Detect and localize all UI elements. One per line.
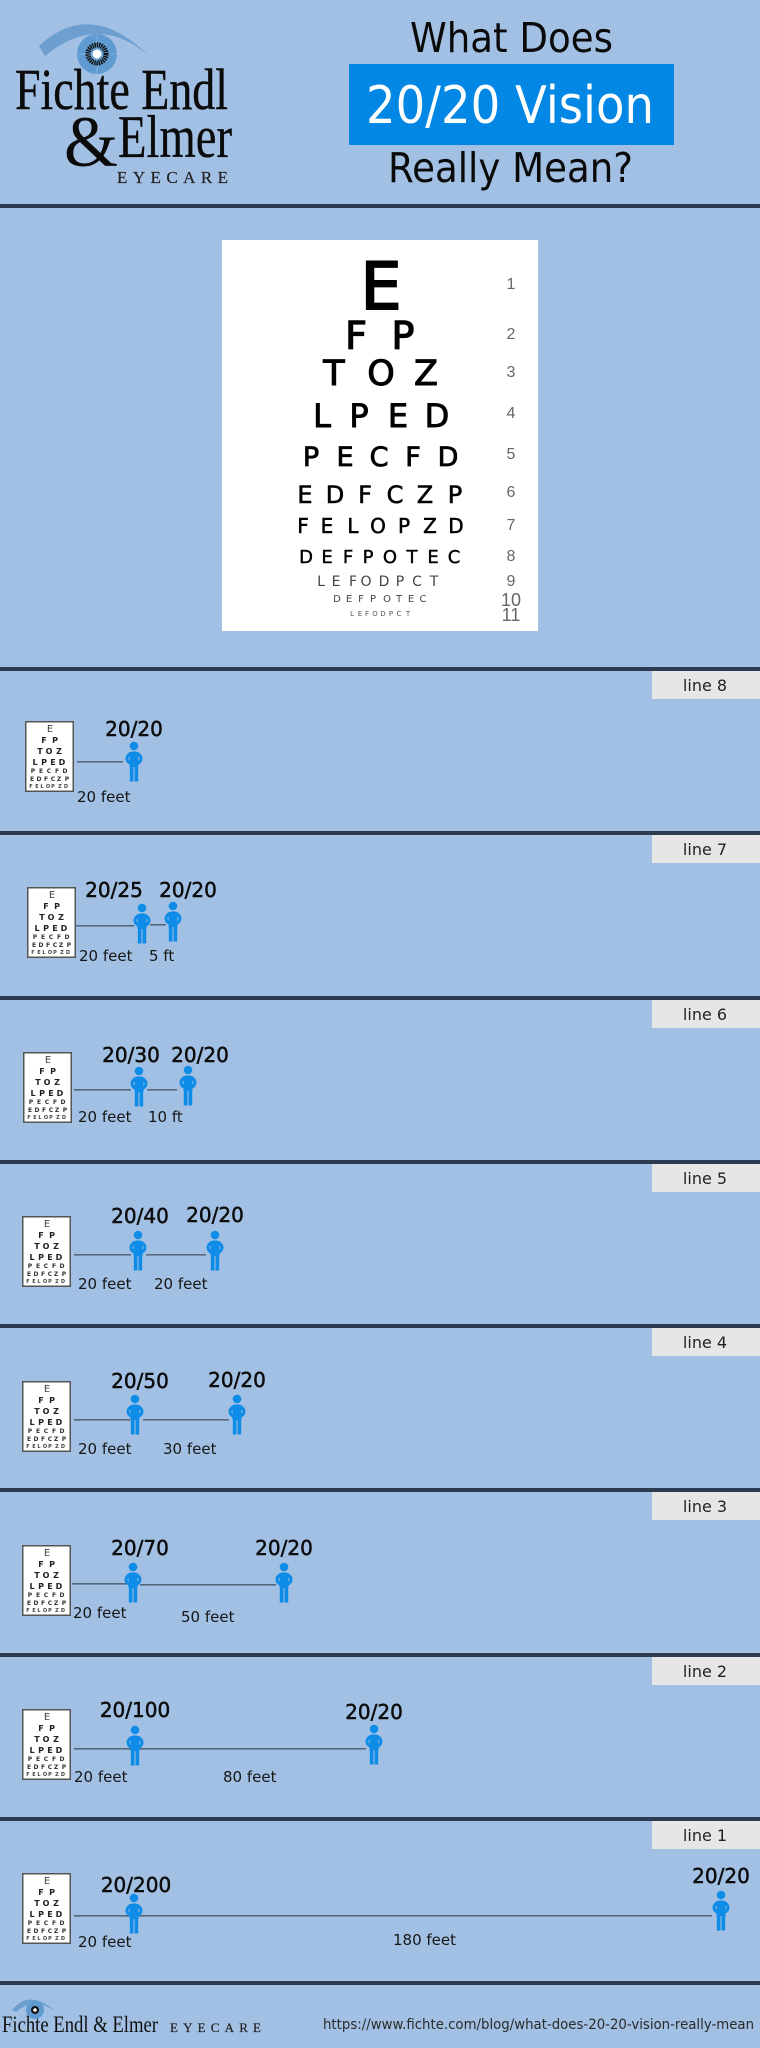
icon: eye brow arc bbox=[39, 24, 149, 56]
distance label: 180 feet bbox=[393, 1931, 456, 1949]
mini eye chart: FP bbox=[41, 736, 58, 745]
eye chart letters: TOZ bbox=[322, 354, 438, 394]
eye chart letters: EDFCZP bbox=[297, 481, 462, 509]
eye chart line numbers: 10 bbox=[501, 590, 521, 610]
eye chart letters: DEFPOTEC bbox=[299, 547, 460, 568]
distance line bbox=[143, 1419, 229, 1421]
tag: line 1 bbox=[652, 1821, 760, 1849]
icon: eye iris bbox=[77, 34, 117, 74]
mini eye chart: FP bbox=[38, 1396, 55, 1405]
tag: line 7 bbox=[652, 835, 760, 863]
mini eye chart bbox=[28, 888, 75, 957]
person bbox=[277, 1563, 291, 1602]
mini eye chart: LPED bbox=[29, 1910, 63, 1919]
logo wordmark line 1: Fichte Endl bbox=[15, 57, 228, 122]
mini eye chart: FP bbox=[43, 902, 60, 911]
eye chart line numbers: 4 bbox=[507, 405, 516, 422]
logo eyecare text: EYECARE bbox=[117, 168, 228, 187]
mini eye chart bbox=[26, 722, 73, 791]
person bbox=[128, 1726, 142, 1766]
distance line bbox=[72, 1583, 127, 1585]
distance line bbox=[75, 925, 134, 927]
mini eye chart: EDFCZP bbox=[28, 1107, 68, 1114]
eye chart line numbers bbox=[501, 276, 521, 625]
distance label: 30 feet bbox=[163, 1440, 217, 1458]
eye chart line numbers: 2 bbox=[507, 326, 516, 343]
acuity label: 20/20 bbox=[345, 1700, 403, 1724]
logo wordmark line 2: Elmer bbox=[118, 104, 232, 170]
footer wordmark: Fichte Endl & Elmer bbox=[2, 2012, 158, 2037]
distance line bbox=[74, 1254, 131, 1256]
distance label: 50 feet bbox=[181, 1608, 235, 1626]
tag: line 7: line 7 bbox=[683, 840, 727, 859]
mini eye chart: FELOPZD bbox=[26, 1936, 65, 1942]
mini eye chart: EDFCZP bbox=[27, 1764, 67, 1771]
person bbox=[181, 1066, 195, 1106]
mini eye chart: EDFCZP bbox=[27, 1436, 67, 1443]
tag: line 2: line 2 bbox=[683, 1662, 727, 1681]
mini eye chart: TOZ bbox=[34, 1899, 59, 1908]
distance label: 20 feet bbox=[73, 1604, 127, 1622]
mini eye chart: LPED bbox=[29, 1253, 63, 1262]
mini eye chart: PECFD bbox=[33, 934, 70, 941]
mini eye chart bbox=[23, 1217, 70, 1286]
tag: line 4: line 4 bbox=[683, 1333, 727, 1352]
mini eye chart: FP bbox=[39, 1067, 56, 1076]
panel: line 8 bbox=[26, 671, 760, 806]
mini eye chart: E bbox=[44, 1219, 50, 1230]
person bbox=[135, 904, 149, 944]
title banner: 20/20 Vision: 20/20 Vision bbox=[366, 76, 654, 136]
eye chart letters: DEFPOTEC bbox=[333, 594, 427, 605]
acuity label: 20/100 bbox=[100, 1698, 170, 1722]
mini eye chart: E bbox=[44, 1384, 50, 1395]
tag: line 1: line 1 bbox=[683, 1826, 727, 1845]
mini eye chart bbox=[24, 1053, 71, 1122]
mini eye chart: LPED bbox=[34, 924, 68, 933]
mini eye chart: PECFD bbox=[29, 1099, 66, 1106]
person bbox=[127, 1894, 141, 1934]
eye chart line numbers: 8 bbox=[507, 548, 516, 565]
tag: line 5: line 5 bbox=[683, 1169, 727, 1188]
mini eye chart: FP bbox=[38, 1560, 55, 1569]
mini eye chart: LPED bbox=[29, 1746, 63, 1755]
acuity label: 20/200 bbox=[101, 1873, 171, 1897]
eye chart line numbers: 11 bbox=[502, 605, 520, 625]
tag: line 8 bbox=[652, 671, 760, 699]
mini eye chart: EDFCZP bbox=[30, 776, 70, 783]
distance line bbox=[140, 1584, 276, 1586]
acuity label: 20/20 bbox=[171, 1043, 229, 1067]
mini eye chart: FELOPZD bbox=[31, 950, 70, 956]
eye chart letters: FP bbox=[345, 314, 414, 358]
person bbox=[166, 902, 180, 942]
mini eye chart: FP bbox=[38, 1888, 55, 1897]
mini eye chart: TOZ bbox=[34, 1407, 59, 1416]
distance label: 20 feet bbox=[78, 1275, 132, 1293]
mini eye chart: E bbox=[49, 890, 55, 901]
mini eye chart: LPED bbox=[30, 1089, 64, 1098]
mini eye chart: EDFCZP bbox=[27, 1600, 67, 1607]
distance line bbox=[77, 761, 123, 763]
mini eye chart: LPED bbox=[29, 1582, 63, 1591]
person bbox=[127, 742, 141, 782]
mini eye chart: FELOPZD bbox=[29, 784, 68, 790]
person bbox=[128, 1395, 142, 1434]
person bbox=[131, 1231, 145, 1270]
header logo: Fichte Endl & Elmer Eyecare bbox=[15, 24, 232, 187]
panel: line 7 bbox=[28, 835, 760, 965]
mini eye chart: EDFCZP bbox=[32, 942, 72, 949]
panel: line 4 bbox=[23, 1328, 760, 1458]
mini eye chart: TOZ bbox=[34, 1735, 59, 1744]
eye chart line numbers: 6 bbox=[507, 484, 516, 501]
distance label: 20 feet bbox=[154, 1275, 208, 1293]
eye chart line numbers: 3 bbox=[507, 364, 516, 381]
eye chart letters: E bbox=[360, 250, 402, 325]
mini eye chart: FP bbox=[38, 1724, 55, 1733]
tag: line 6: line 6 bbox=[683, 1005, 727, 1024]
tag: line 3: line 3 bbox=[683, 1497, 727, 1516]
mini eye chart: PECFD bbox=[28, 1428, 65, 1435]
eye chart line numbers: 5 bbox=[507, 446, 516, 463]
distance label: 80 feet bbox=[223, 1768, 277, 1786]
distance label: 20 feet bbox=[79, 947, 133, 965]
mini eye chart bbox=[23, 1874, 70, 1943]
distance label: 20 feet bbox=[78, 1108, 132, 1126]
eye chart letters: FELOPZD bbox=[297, 514, 464, 538]
distance line bbox=[150, 924, 166, 926]
mini eye chart: FELOPZD bbox=[26, 1444, 65, 1450]
tag: line 5 bbox=[652, 1164, 760, 1192]
eye chart letters: LPED bbox=[313, 397, 449, 435]
panel: line 3 bbox=[23, 1492, 760, 1626]
mini eye chart: PECFD bbox=[28, 1756, 65, 1763]
mini eye chart: PECFD bbox=[31, 768, 68, 775]
tag: line 8: line 8 bbox=[683, 676, 727, 695]
acuity label: 20/70 bbox=[111, 1536, 169, 1560]
mini eye chart: E bbox=[47, 724, 53, 735]
eye chart line numbers: 1 bbox=[507, 276, 516, 293]
acuity label: 20/20 bbox=[208, 1368, 266, 1392]
acuity label: 20/20 bbox=[692, 1864, 750, 1888]
mini eye chart: FELOPZD bbox=[27, 1115, 66, 1121]
mini eye chart: PECFD bbox=[28, 1592, 65, 1599]
mini eye chart: E bbox=[44, 1876, 50, 1887]
mini eye chart: EDFCZP bbox=[27, 1271, 67, 1278]
distance label: 20 feet bbox=[78, 1933, 132, 1951]
mini eye chart: PECFD bbox=[28, 1920, 65, 1927]
mini eye chart: FELOPZD bbox=[26, 1279, 65, 1285]
acuity label: 20/20 bbox=[159, 878, 217, 902]
title: What Does: What Does bbox=[410, 14, 613, 62]
eye chart line numbers: 7 bbox=[507, 517, 516, 534]
distance line bbox=[74, 1915, 712, 1917]
person bbox=[230, 1395, 244, 1434]
mini eye chart bbox=[23, 1382, 70, 1451]
mini eye chart bbox=[23, 1710, 70, 1779]
mini eye chart: PECFD bbox=[28, 1263, 65, 1270]
footer eyecare text: EYECARE bbox=[170, 2020, 261, 2035]
distance label: 10 ft bbox=[148, 1108, 183, 1126]
panel: line 2 bbox=[23, 1657, 760, 1786]
acuity label: 20/25 bbox=[85, 878, 143, 902]
acuity label: 20/20 bbox=[255, 1536, 313, 1560]
panel: line 6 bbox=[24, 1000, 760, 1126]
acuity label: 20/40 bbox=[111, 1204, 169, 1228]
tag: line 4 bbox=[652, 1328, 760, 1356]
footer logo bbox=[2, 1999, 261, 2037]
mini eye chart: LPED bbox=[32, 758, 66, 767]
logo ampersand: & bbox=[64, 102, 118, 182]
eye chart letters: LEFODPCT bbox=[350, 610, 411, 618]
mini eye chart: E bbox=[44, 1548, 50, 1559]
acuity label: 20/30 bbox=[102, 1043, 160, 1067]
distance line bbox=[74, 1419, 130, 1421]
distance line bbox=[146, 1254, 206, 1256]
panel: line 5 bbox=[23, 1164, 760, 1293]
distance label: 5 ft bbox=[149, 947, 174, 965]
eye chart letters: PECFD bbox=[303, 442, 458, 473]
distance label: 20 feet bbox=[78, 1440, 132, 1458]
mini eye chart: E bbox=[44, 1712, 50, 1723]
mini eye chart: TOZ bbox=[34, 1571, 59, 1580]
acuity label: 20/50 bbox=[111, 1369, 169, 1393]
person bbox=[126, 1563, 140, 1602]
distance line bbox=[74, 1748, 366, 1750]
person bbox=[132, 1067, 146, 1106]
distance label: 20 feet bbox=[77, 788, 131, 806]
eye chart line numbers: 9 bbox=[507, 573, 516, 590]
person bbox=[208, 1231, 222, 1270]
title: Really Mean?: Really Mean? bbox=[388, 144, 633, 192]
mini eye chart: E bbox=[45, 1055, 51, 1066]
mini eye chart: TOZ bbox=[37, 747, 62, 756]
mini eye chart: EDFCZP bbox=[27, 1928, 67, 1935]
tag: line 6 bbox=[652, 1000, 760, 1028]
eye chart letters: LEFODPCT bbox=[317, 574, 439, 590]
acuity label: 20/20 bbox=[186, 1203, 244, 1227]
mini eye chart: FELOPZD bbox=[26, 1608, 65, 1614]
mini eye chart: TOZ bbox=[35, 1078, 60, 1087]
tag: line 2 bbox=[652, 1657, 760, 1685]
title banner: 20/20 Vision bbox=[349, 64, 674, 145]
mini eye chart bbox=[23, 1546, 70, 1615]
icon: small eye bbox=[12, 1999, 56, 2019]
distance line bbox=[147, 1089, 177, 1091]
mini eye chart: TOZ bbox=[39, 913, 64, 922]
panel: line 1 bbox=[23, 1821, 760, 1951]
mini eye chart: LPED bbox=[29, 1418, 63, 1427]
mini eye chart: FELOPZD bbox=[26, 1772, 65, 1778]
tag: line 3 bbox=[652, 1492, 760, 1520]
person bbox=[714, 1891, 728, 1930]
distance line bbox=[74, 1089, 131, 1091]
person bbox=[367, 1725, 381, 1764]
eye chart letters bbox=[297, 250, 464, 618]
distance label: 20 feet bbox=[74, 1768, 128, 1786]
panel: large eye chart bbox=[222, 240, 538, 631]
mini eye chart: FP bbox=[38, 1231, 55, 1240]
mini eye chart: TOZ bbox=[34, 1242, 59, 1251]
acuity label: 20/20 bbox=[105, 717, 163, 741]
